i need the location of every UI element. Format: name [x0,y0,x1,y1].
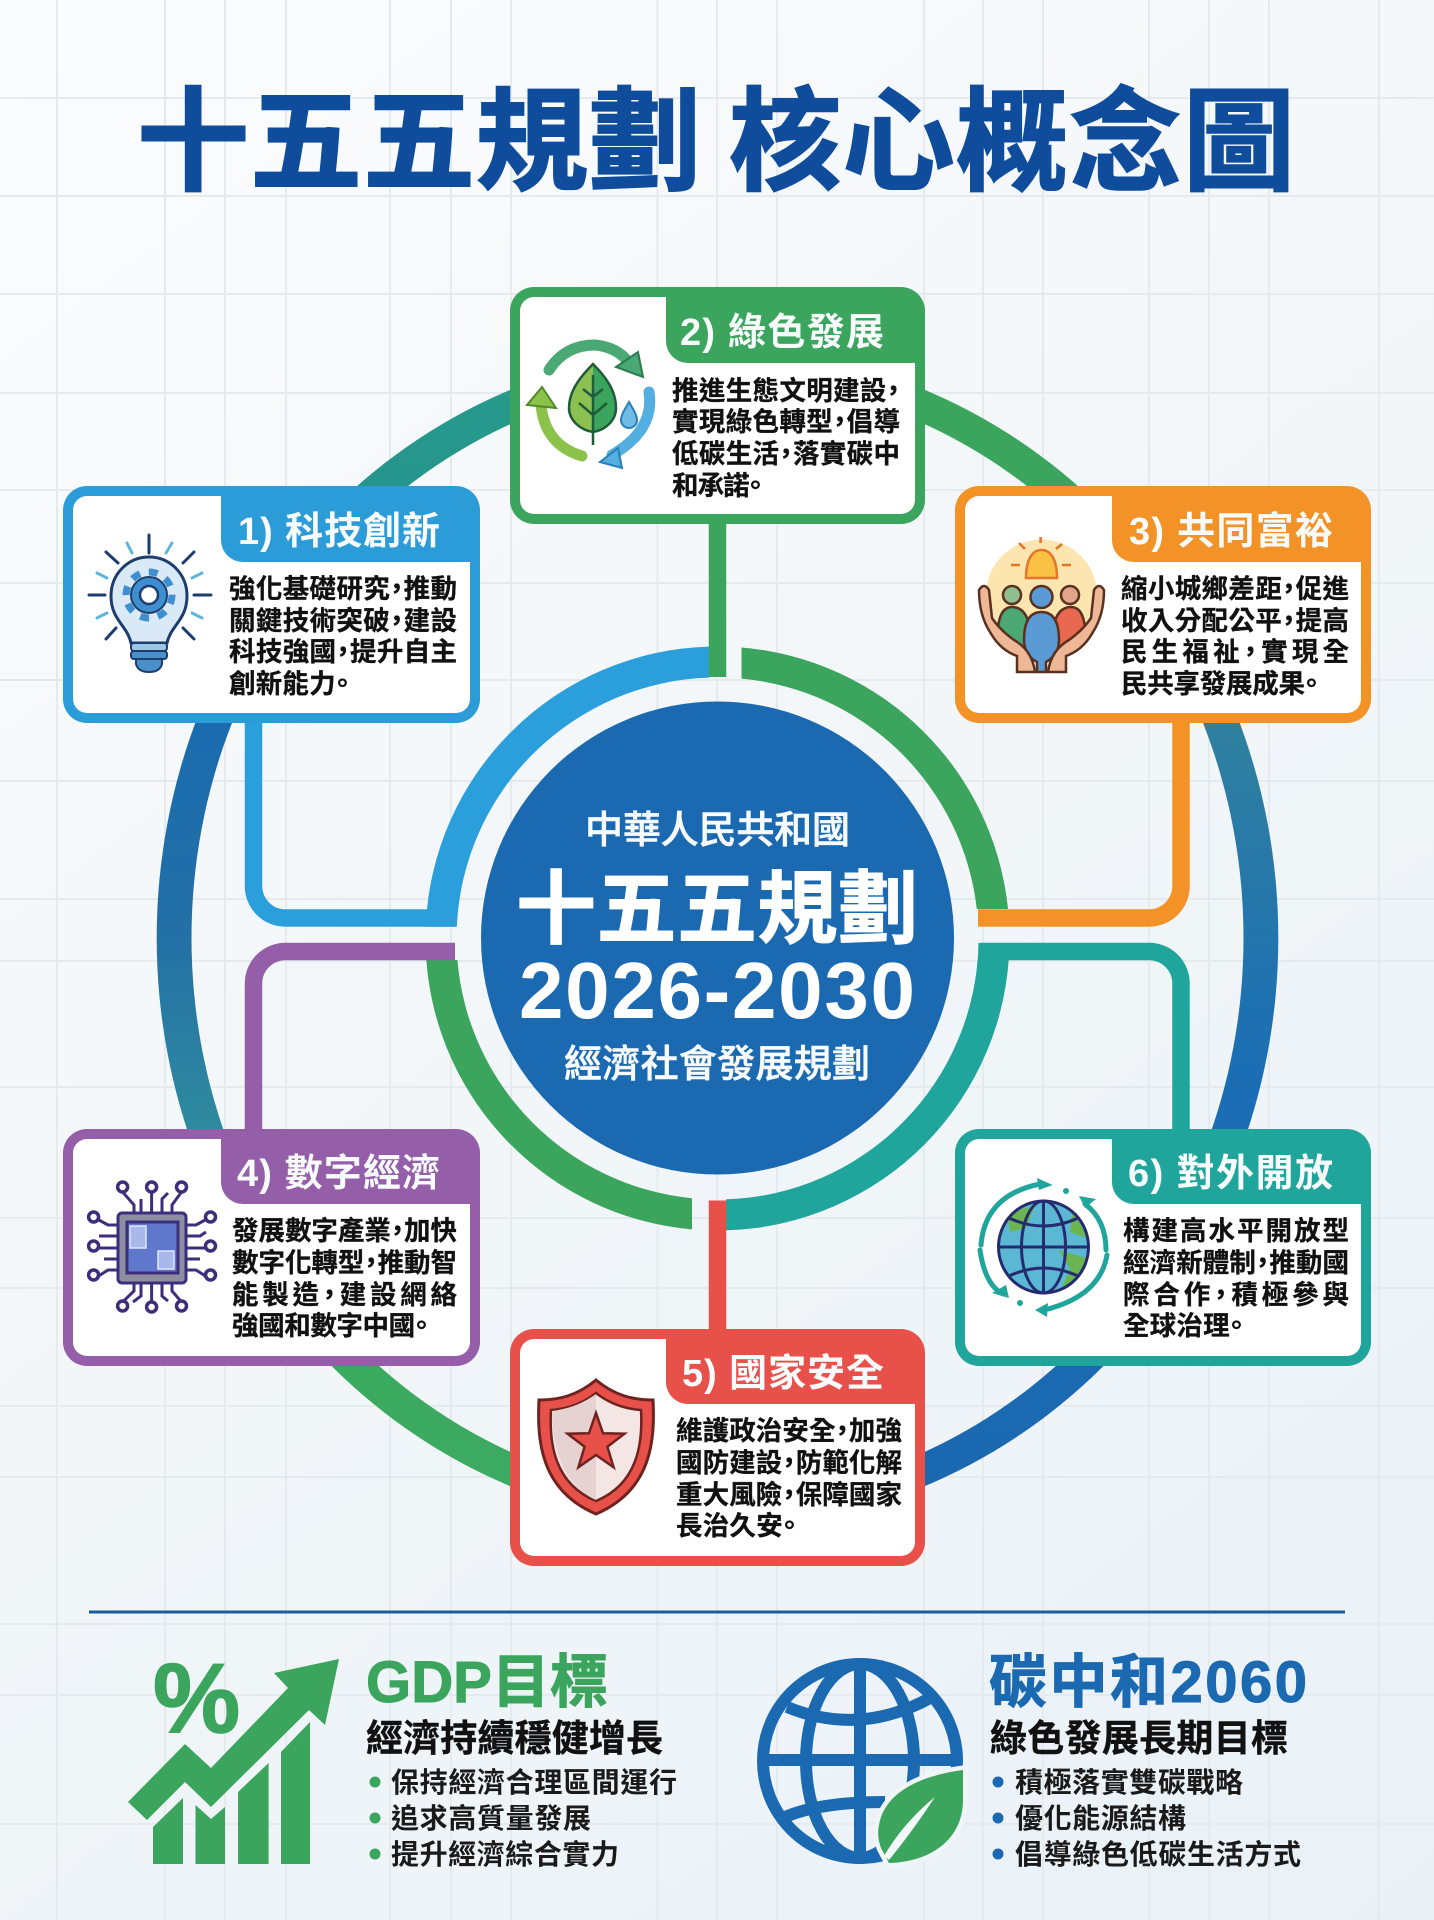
panel: 1 科技創新 [63,486,480,723]
icon: globe with arrows [980,1178,1107,1317]
body text [672,376,900,501]
card frame [510,287,925,524]
bullet list [370,1767,677,1870]
center label: description: 經濟社會發展規劃 [564,1044,870,1086]
panel: 6 對外開放 [955,1129,1371,1366]
body text [676,1416,902,1541]
icon: globe with leaf [763,1664,963,1863]
outer ring [157,348,1278,1528]
body text [232,1216,458,1341]
body text: 構建高水平開放型 [1123,1216,1349,1246]
bullet list: 保持經濟合理區間運行 [391,1767,677,1798]
title: 核心概念圖 [729,80,1295,205]
icon: light bulb with gear [89,535,211,672]
heading: 5) 國家安全 [682,1353,884,1395]
bullet list [992,1767,1301,1870]
heading: 4) 數字經濟 [237,1153,440,1195]
panel: 3 共同富裕 [955,486,1371,723]
bullet list: 追求高質量發展 [391,1803,591,1834]
panel: carbon neutrality [763,1650,1307,1870]
panel: 4 數字經濟 [63,1129,480,1366]
body text: 創新能力。 [229,669,349,699]
heading: GDP target: GDP目標 [366,1650,608,1715]
panel: 5 國家安全 [510,1329,925,1566]
card frame [510,1329,925,1566]
body text: 數字化轉型，推動智 [232,1248,457,1278]
body text: 發展數字產業，加快 [232,1216,457,1246]
inner ring arcs [426,647,1010,1230]
subheading: 經濟持續穩健增長 [366,1718,663,1759]
body text: 縮小城鄉差距，促進 [1121,574,1350,604]
center label: country: 中華人民共和國 [585,810,850,852]
body text [1121,574,1350,699]
body text: 際合作，積極參與 [1123,1280,1349,1310]
title: 十五五規劃 [137,80,701,205]
body text: 關鍵技術突破，建設 [229,606,457,636]
body text: 國防建設，防範化解 [676,1448,902,1478]
heading: 2) 綠色發展 [680,312,884,354]
body text: 收入分配公平，提高 [1121,606,1349,636]
card frame [63,486,480,723]
body text: 經濟新體制，推動國 [1123,1248,1349,1278]
icon: shield with star [539,1380,653,1514]
body text: 全球治理。 [1123,1311,1243,1341]
body text: 低碳生活，落實碳中 [672,439,900,469]
body text: 重大風險，保障國家 [676,1480,902,1510]
center label: plan name: 十五五規劃 [516,865,918,954]
center label: years: 2026-2030 [519,946,915,1035]
connectors [254,515,1181,1335]
card frame [63,1129,480,1366]
body text: 和承諾。 [672,471,762,501]
body text: 維護政治安全，加強 [676,1416,902,1446]
body text: 長治久安。 [676,1511,796,1541]
body text: 科技強國，提升自主 [229,637,457,667]
body text [1123,1216,1349,1341]
icon: recycling leaf [527,345,650,468]
heading: 1) 科技創新 [238,511,440,553]
body text: 民生福祉，實現全 [1121,637,1350,667]
card frame [955,1129,1371,1366]
body text [229,574,457,699]
body text: 強國和數字中國。 [232,1311,428,1341]
title [137,80,1295,205]
center circle [481,702,954,1174]
bullet list: 倡導綠色低碳生活方式 [1015,1839,1301,1870]
body text: 民共享發展成果。 [1121,669,1318,699]
subheading: 綠色發展長期目標 [990,1718,1288,1759]
icon: circuit chip [89,1182,216,1312]
body text: 能製造，建設網絡 [232,1280,458,1310]
panel: GDP target [128,1643,677,1870]
icon: growth chart with percent [128,1643,339,1864]
icon: hands holding people [979,537,1104,672]
card frame [955,486,1371,723]
heading: 3) 共同富裕 [1129,511,1333,553]
bullet list: 積極落實雙碳戰略 [1015,1767,1243,1798]
heading: carbon neutral 2060: 碳中和2060 [989,1650,1307,1715]
heading: 6) 對外開放 [1128,1153,1333,1195]
icon: growth chart with percent: % [153,1643,240,1753]
bullet list: 優化能源結構 [1015,1803,1186,1834]
bullet list: 提升經濟綜合實力 [391,1839,619,1870]
body text: 實現綠色轉型，倡導 [672,407,900,437]
panel: 2 綠色發展 [510,287,925,524]
body text: 推進生態文明建設， [672,376,900,406]
body text: 強化基礎研究，推動 [229,574,457,604]
